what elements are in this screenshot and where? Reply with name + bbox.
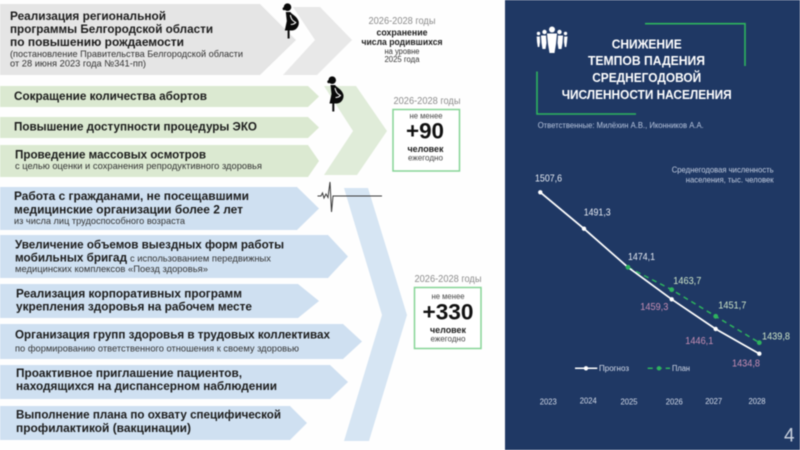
icon: people group (537, 26, 568, 53)
panel: health measures: Реализация корпоративных программ (16, 286, 242, 300)
panel: health measures: медицинские организации более 2 лет (14, 202, 243, 216)
title: ЧИСЛЕННОСТИ НАСЕЛЕНИЯ (562, 88, 732, 102)
panel: reproductive measures: Проведение массовых осмотров (15, 148, 206, 162)
title frame (537, 24, 745, 114)
panel: health measures: находящихся на диспансерном наблюдении (16, 379, 277, 393)
result: keep births: 2025 года (384, 55, 420, 64)
line chart: 1451,7 (718, 300, 746, 312)
chart subtitle: Среднегодовая численность (672, 164, 774, 174)
icon: pregnant woman middle (327, 76, 344, 112)
result: keep births: 2026-2028 годы (368, 16, 436, 27)
line chart: 1474,1 (628, 251, 655, 263)
panel: regional programme: по повышению рождаемости (10, 35, 184, 49)
result: plus 330: 2026-2028 годы (414, 274, 482, 285)
result: keep births: сохранение (376, 28, 428, 38)
year axis: 2028 (748, 396, 766, 406)
panel: health measures: из числа лиц трудоспособного возраста (14, 216, 186, 227)
result: plus 330: человек (430, 325, 466, 335)
chart subtitle (672, 164, 774, 184)
responsible persons: Ответственные: Милёхин А.В., Иконников А.А. (538, 120, 704, 130)
panel: health measures: медицинских комплексов «Поезд здоровья» (15, 264, 208, 275)
panel: reproductive measures: Повышение доступности процедуры ЭКО (14, 120, 257, 134)
line chart: 1439,8 (762, 330, 790, 342)
panel: health measures: мобильных бригад (15, 250, 127, 264)
result: plus 90: 2026-2028 годы (394, 96, 460, 107)
legend: План (672, 363, 690, 373)
result: plus 90: не менее (410, 112, 443, 120)
line chart (535, 172, 790, 370)
year axis: 2027 (705, 396, 722, 406)
result: plus 90 (393, 96, 460, 171)
panel: reproductive measures (0, 86, 387, 177)
result: plus 330 (414, 274, 482, 348)
panel: health measures: Организация групп здоровья в трудовых коллективах (15, 328, 330, 342)
year axis: 2025 (620, 397, 638, 407)
line chart: 1434,8 (732, 358, 760, 370)
panel: health measures (0, 187, 407, 441)
result: keep births: числа родившихся (362, 37, 442, 48)
panel: health measures: укрепления здоровья на рабочем месте (16, 300, 252, 314)
year axis: 2023 (540, 397, 557, 407)
panel: regional programme (0, 4, 352, 75)
year axis: 2024 (580, 395, 597, 405)
title: СНИЖЕНИЕ (612, 38, 682, 52)
panel: reproductive measures: Сокращение количества абортов (14, 89, 207, 103)
year axis: 2026 (666, 397, 683, 407)
panel: health measures: с использованием передвижных (130, 254, 271, 264)
panel: population chart background (505, 0, 800, 450)
result: plus 330: ежегодно (430, 334, 466, 344)
title: СРЕДНЕГОДОВОЙ (592, 70, 701, 85)
chart subtitle: населения, тыс. человек (686, 174, 774, 184)
title: ТЕМПОВ ПАДЕНИЯ (588, 54, 705, 68)
line chart: 1491,3 (584, 206, 611, 218)
legend: Прогноз (599, 363, 629, 373)
result: keep births: на уровне (384, 47, 420, 56)
line chart: 1459,3 (640, 301, 668, 313)
panel: health measures: Проактивное приглашение пациентов, (16, 366, 242, 380)
result: plus 90: ежегодно (408, 154, 444, 162)
result: keep births (362, 16, 442, 64)
panel: regional programme: (постановление Правительства Белгородской области (10, 49, 243, 60)
page number: 4 (784, 426, 795, 447)
result: plus 90: +90 (406, 118, 444, 144)
line chart: 1446,1 (685, 335, 713, 347)
panel: regional programme: от 28 июня 2023 года №341-пп) (10, 58, 146, 70)
legend (575, 363, 690, 373)
panel: regional programme: Реализация региональной (10, 9, 166, 23)
icon: pregnant woman top (283, 3, 299, 38)
icon: heartbeat line (318, 182, 382, 212)
year axis (540, 395, 766, 407)
title (562, 38, 732, 102)
result: plus 330: +330 (422, 300, 474, 324)
line chart: 1507,6 (535, 172, 562, 184)
panel: health measures: Работа с гражданами, не посещавшими (14, 189, 249, 203)
panel: reproductive measures: с целью оценки и сохранения репродуктивного здоровья (15, 161, 262, 172)
panel: health measures: по формированию ответственного отношения к своему здоровью (15, 344, 299, 354)
line chart: 1463,7 (673, 275, 701, 287)
panel: health measures: Выполнение плана по охвату специфической (16, 408, 281, 422)
panel: regional programme: программы Белгородской области (10, 22, 213, 36)
result: plus 330: не менее (432, 292, 465, 301)
panel: health measures: Увеличение объемов выездных форм работы (15, 238, 284, 252)
panel: health measures: профилактикой (вакцинации) (16, 421, 191, 435)
result: plus 90: человек (408, 144, 444, 154)
